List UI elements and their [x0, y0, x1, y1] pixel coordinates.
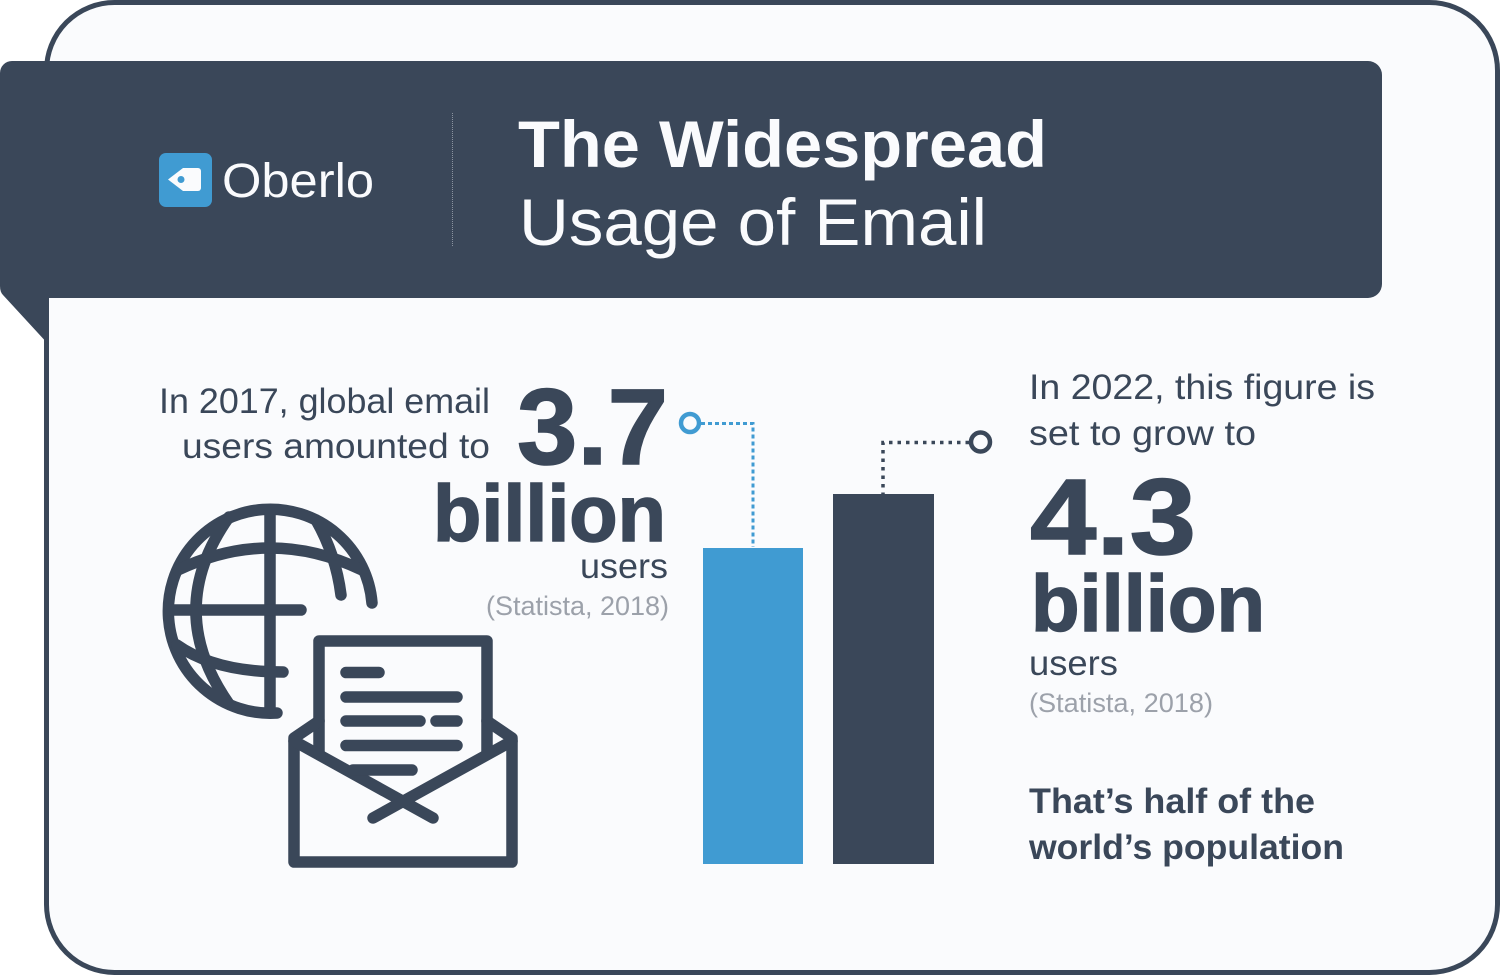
callout: half of the world's population: world’s population: [1028, 828, 1344, 867]
text block: 2017 statistic: In 2017, global email: [159, 382, 490, 421]
icon: price tag: [159, 153, 212, 207]
text block: 2022 statistic: 4.3: [1030, 456, 1196, 577]
icon: globe: [168, 509, 372, 713]
text block: 2017 statistic: (Statista, 2018): [486, 591, 669, 621]
connector: 2022: [883, 432, 990, 494]
bar chart: [703, 494, 934, 864]
icon: envelope with letter: [294, 641, 512, 862]
bar: 2022: [833, 494, 934, 864]
logo: Oberlo: [159, 153, 374, 208]
header banner: [0, 61, 1382, 345]
bar: 2017: [703, 548, 803, 864]
connector: 2017: [681, 414, 753, 547]
text block: 2017 statistic: users: [580, 547, 668, 586]
text block: 2022 statistic: set to grow to: [1029, 414, 1256, 453]
text block: 2022 statistic: [1029, 368, 1375, 718]
text block: 2022 statistic: users: [1029, 644, 1118, 683]
text block: 2022 statistic: In 2022, this figure is: [1029, 368, 1375, 407]
title: [518, 107, 1047, 259]
text block: 2022 statistic: billion: [1031, 559, 1265, 648]
logo wordmark: Oberlo: [222, 155, 374, 208]
text block: 2017 statistic: 3.7: [517, 366, 668, 487]
callout: half of the world's population: That’s half of the: [1029, 782, 1315, 821]
title: Usage of Email: [519, 185, 987, 259]
title: The Widespread: [518, 107, 1047, 181]
text block: 2017 statistic: [159, 366, 669, 621]
callout: half of the world's population: [1028, 782, 1344, 867]
text block: 2017 statistic: billion: [433, 469, 666, 558]
text block: 2022 statistic: (Statista, 2018): [1029, 688, 1213, 718]
text block: 2017 statistic: users amounted to: [182, 427, 490, 466]
